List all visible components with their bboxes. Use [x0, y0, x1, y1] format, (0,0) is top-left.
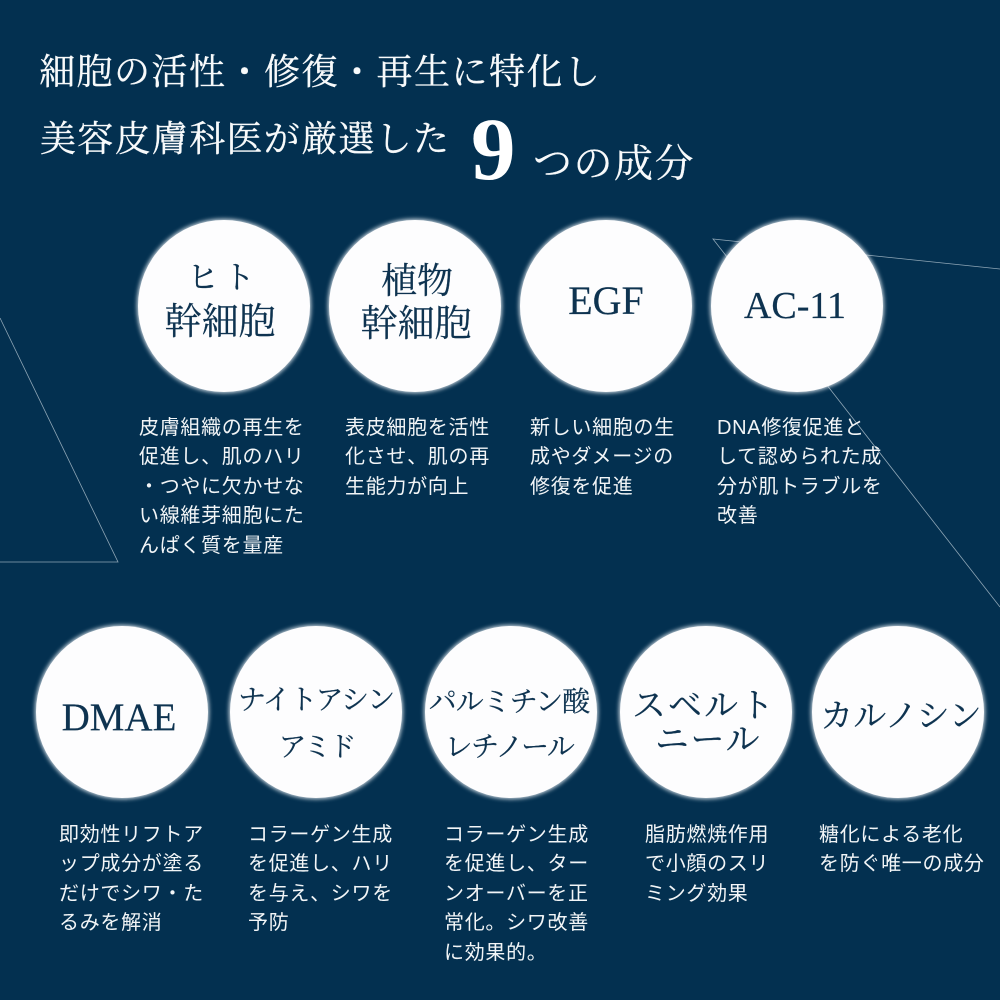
circle: AC-11: [711, 220, 883, 392]
circle: スベルトニール: スベルト: [632, 688, 776, 725]
description: DMAE: るみを解消: [59, 912, 162, 934]
description: ヒト幹細胞: 皮膚組織の再生を: [139, 417, 305, 439]
panel: ナイトアシンアミド: [226, 622, 406, 934]
description: EGF: 成やダメージの: [530, 446, 674, 468]
description: カルノシン: 糖化による老化: [819, 824, 963, 846]
circle: ヒト幹細胞: ヒト: [187, 259, 259, 295]
big number 9: 9: [471, 101, 516, 199]
description: スベルトニール: 脂肪燃焼作用: [645, 824, 769, 846]
circle: ヒト幹細胞: 幹細胞: [164, 302, 276, 343]
description: AC-11: DNA修復促進と: [717, 417, 865, 439]
description: ナイトアシンアミド: コラーゲン生成: [248, 824, 393, 846]
circle: ナイトアシンアミド: [230, 626, 402, 798]
circle: ヒト幹細胞: [138, 220, 310, 392]
description: ヒト幹細胞: い線維芽細胞にた: [139, 505, 305, 527]
description: スベルトニール: [645, 824, 769, 905]
description: DMAE: [59, 824, 204, 934]
description: ヒト幹細胞: 促進し、肌のハリ: [139, 446, 305, 468]
panel: スベルトニール: [616, 622, 796, 905]
description: カルノシン: [819, 824, 985, 875]
description: パルミチン酸レチノール: を促進し、ター: [444, 853, 589, 875]
panel: AC-11: [706, 216, 888, 527]
description: ナイトアシンアミド: 予防: [248, 912, 289, 934]
title: [39, 52, 695, 199]
description: 植物幹細胞: [345, 417, 490, 498]
description: AC-11: して認められた成: [717, 446, 882, 468]
description: DMAE: ップ成分が塗る: [59, 853, 204, 875]
circle: DMAE: [36, 626, 208, 798]
circle: DMAE: DMAE: [62, 696, 176, 739]
description: ヒト幹細胞: [139, 417, 305, 557]
panel: 植物幹細胞: [324, 216, 506, 498]
description: EGF: [530, 417, 675, 498]
description: AC-11: [717, 417, 883, 527]
title line 2: 美容皮膚科医が厳選した: [40, 119, 450, 159]
circle: パルミチン酸レチノール: パルミチン酸: [429, 687, 589, 718]
panel: パルミチン酸レチノール: [420, 622, 602, 964]
description: パルミチン酸レチノール: コラーゲン生成: [444, 824, 589, 846]
description: DMAE: 即効性リフトア: [59, 824, 204, 846]
description: ナイトアシンアミド: を与え、シワを: [248, 883, 393, 905]
description: パルミチン酸レチノール: [444, 824, 589, 964]
circle: パルミチン酸レチノール: [425, 626, 597, 798]
circle: カルノシン: [812, 626, 984, 798]
description: 植物幹細胞: 表皮細胞を活性: [345, 417, 490, 439]
panel: ヒト幹細胞: [134, 216, 314, 557]
panel: DMAE: [32, 622, 212, 934]
panel: カルノシン: [808, 622, 988, 875]
description: スベルトニール: ミング効果: [645, 883, 748, 905]
description: ナイトアシンアミド: を促進し、ハリ: [248, 853, 393, 875]
circle: スベルトニール: [620, 626, 792, 798]
description: パルミチン酸レチノール: に効果的。: [444, 942, 548, 964]
description: ヒト幹細胞: ・つやに欠かせな: [139, 476, 305, 498]
circle: EGF: [520, 220, 692, 392]
description: ナイトアシンアミド: [248, 824, 393, 934]
description: AC-11: 分が肌トラブルを: [717, 476, 883, 498]
circle: 植物幹細胞: [329, 220, 501, 392]
circle: 植物幹細胞: 幹細胞: [360, 304, 472, 345]
description: DMAE: だけでシワ・た: [59, 883, 204, 905]
description: カルノシン: を防ぐ唯一の成分: [819, 853, 985, 875]
circle: AC-11: AC-11: [744, 285, 846, 327]
title line 1: 細胞の活性・修復・再生に特化し: [39, 52, 602, 92]
description: パルミチン酸レチノール: 常化。シワ改善: [444, 912, 589, 934]
description: 植物幹細胞: 生能力が向上: [345, 476, 469, 498]
description: EGF: 修復を促進: [530, 476, 634, 498]
circle: ナイトアシンアミド: アミド: [278, 732, 354, 763]
circle: ナイトアシンアミド: ナイトアシン: [238, 685, 394, 716]
panel: EGF: [516, 216, 696, 498]
description: EGF: 新しい細胞の生: [530, 417, 675, 439]
description: パルミチン酸レチノール: ンオーバーを正: [444, 883, 589, 905]
circle: EGF: EGF: [568, 278, 644, 323]
description: ヒト幹細胞: んぱく質を量産: [139, 535, 284, 557]
description: AC-11: 改善: [717, 505, 758, 527]
circle: カルノシン: カルノシン: [820, 699, 982, 735]
description: 植物幹細胞: 化させ、肌の再: [345, 446, 490, 468]
circle: パルミチン酸レチノール: レチノール: [445, 732, 573, 763]
title line 2 suffix: つの成分: [533, 143, 695, 186]
circle: 植物幹細胞: 植物: [381, 261, 453, 301]
description: スベルトニール: で小顔のスリ: [645, 853, 769, 875]
circle: スベルトニール: ニール: [655, 722, 761, 759]
